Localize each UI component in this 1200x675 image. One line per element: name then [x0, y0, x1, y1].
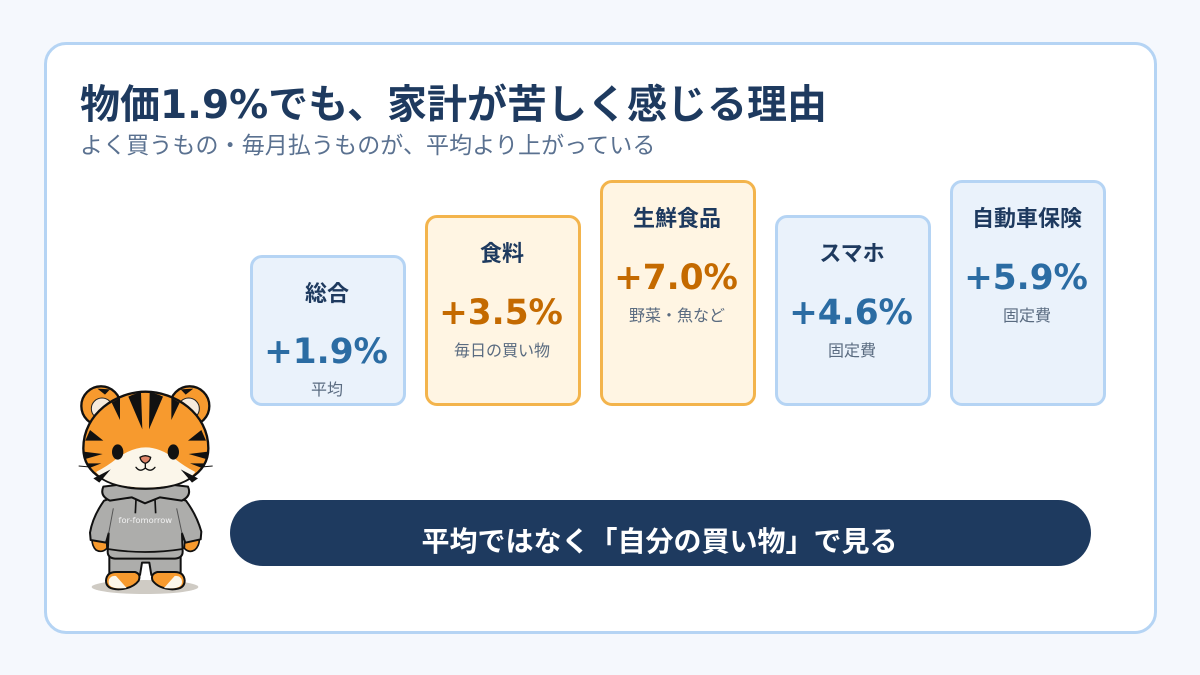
banner: takeaway: 平均ではなく「自分の買い物」で見る: [421, 525, 898, 558]
ears: [81, 386, 121, 426]
banner: takeaway: [230, 500, 1091, 566]
panel: 食料: [425, 215, 581, 406]
eyes: [112, 444, 123, 460]
note: 固定費: 固定費: [828, 341, 876, 360]
note: 平均: 平均: [311, 380, 343, 399]
label: 食料: 食料: [480, 242, 524, 267]
title: 物価1.9%でも、家計が苦しく感じる理由: [80, 82, 827, 128]
note: 固定費: 固定費: [1003, 306, 1051, 325]
face white: [96, 447, 195, 488]
panel: 総合: [250, 255, 406, 406]
subtitle: よく買うもの・毎月払うものが、平均より上がっている: [80, 133, 655, 159]
panel: 生鮮食品: [600, 180, 756, 406]
panel: スマホ: [775, 215, 931, 406]
value: +4.6%: +4.6%: [789, 293, 913, 333]
value: +1.9%: +1.9%: [264, 332, 388, 372]
shadow: [92, 580, 198, 594]
icon: tiger mascot: [78, 385, 213, 594]
label: 生鮮食品: 生鮮食品: [633, 207, 721, 232]
note: 毎日の買い物: 毎日の買い物: [454, 341, 550, 360]
label: 自動車保険: 自動車保険: [972, 207, 1082, 232]
note: 野菜・魚など: 野菜・魚など: [629, 306, 725, 325]
whiskers: [79, 466, 213, 467]
hoodie text: for-fomorrow: [119, 515, 172, 525]
hoodie body: [90, 492, 201, 559]
label: 総合: 総合: [305, 282, 349, 307]
nose and mouth: [140, 456, 151, 463]
panel: 自動車保険: [950, 180, 1106, 406]
label: スマホ: スマホ: [819, 242, 885, 267]
hood: [102, 483, 189, 503]
legs: [106, 553, 185, 589]
stripes: [83, 393, 208, 483]
value: +7.0%: +7.0%: [614, 258, 738, 298]
hands: [92, 539, 107, 551]
value: +5.9%: +5.9%: [964, 258, 1088, 298]
value: +3.5%: +3.5%: [439, 293, 563, 333]
head: [83, 392, 208, 489]
